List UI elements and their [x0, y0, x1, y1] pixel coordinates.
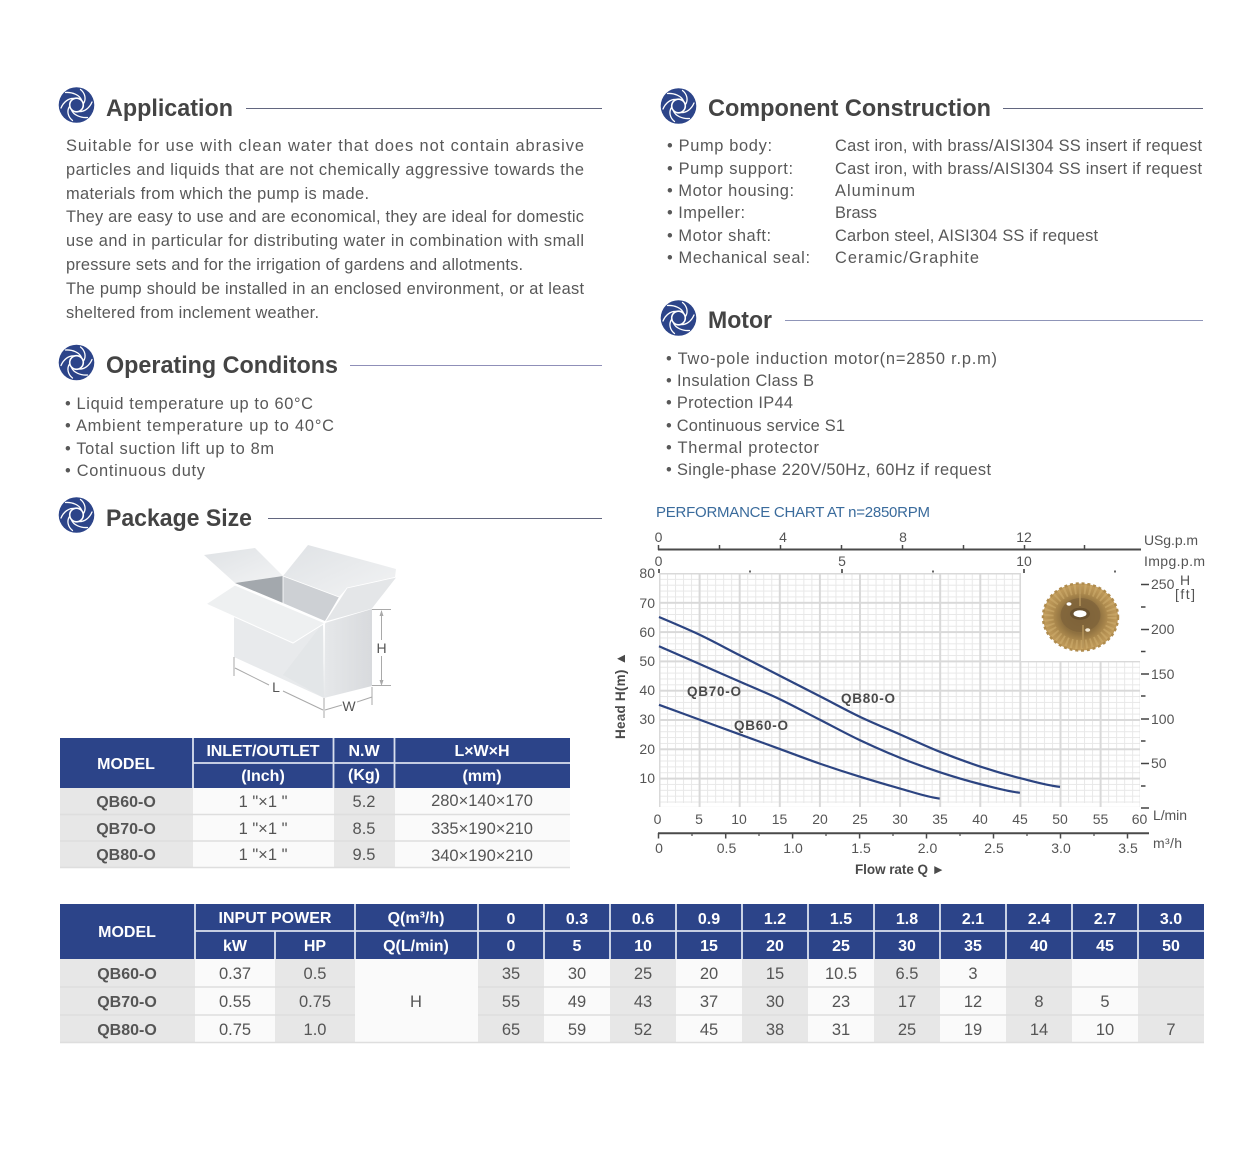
illustration: open carton with dimensions: H: [376, 640, 387, 656]
curve labels: QB80-O: [841, 691, 895, 706]
table: hydraulic performance: 15: [700, 938, 718, 955]
axis: head in metres: 40: [639, 682, 655, 698]
axis: flow in m3/h: 0.5: [717, 840, 736, 856]
list: component materials: Carbon steel, AISI304 SS if request: [835, 227, 1098, 245]
table: hydraulic performance: HP: [304, 938, 326, 955]
table: hydraulic performance: 0: [507, 911, 516, 928]
table: hydraulic performance: 10: [634, 938, 652, 955]
list: component materials: Brass: [835, 204, 877, 222]
table: hydraulic performance: 0.55: [219, 993, 251, 1011]
curve labels: QB70-O: [687, 684, 741, 699]
list: component materials: Ceramic/Graphite: [835, 249, 979, 267]
table: hydraulic performance: 30: [568, 965, 586, 983]
table: package size: 1 "×1 ": [239, 793, 288, 811]
heading: Operating Conditons: [59, 345, 602, 380]
axis: head in feet: 150: [1151, 666, 1175, 682]
list: motor features: • Insulation Class B: [666, 372, 814, 390]
table: hydraulic performance: 2.1: [962, 911, 984, 928]
table: hydraulic performance: 0.5: [304, 965, 326, 983]
axis: head in feet: H: [1180, 572, 1190, 588]
table: hydraulic performance: 40: [1030, 938, 1048, 955]
table: hydraulic performance: H: [410, 993, 422, 1011]
table: hydraulic performance: 10.5: [825, 965, 857, 983]
table: hydraulic performance: 20: [766, 938, 784, 955]
table: hydraulic performance: 2.4: [1028, 911, 1050, 928]
axis: head in metres: 20: [639, 741, 655, 757]
axis: Impg.p.m: 5: [838, 553, 846, 569]
table: package size: QB80-O: [96, 847, 156, 864]
axis: flow in L/min: 55: [1093, 811, 1108, 827]
axis: flow in L/min: 50: [1052, 811, 1068, 827]
list: component materials: Aluminum: [835, 182, 915, 200]
table: hydraulic performance: 0.9: [698, 911, 720, 928]
list: component materials: • Pump body:: [667, 137, 772, 155]
heading: Application: [59, 87, 602, 123]
text block: application description: materials from which the pump is made.: [66, 185, 369, 203]
axis: head in feet: 50: [1151, 755, 1167, 771]
table: package size: (mm): [462, 768, 502, 785]
table: hydraulic performance: INPUT POWER: [219, 910, 332, 927]
list: motor features: • Thermal protector: [666, 439, 820, 457]
table: hydraulic performance: 55: [502, 993, 520, 1011]
illustration: open carton with dimensions: [204, 545, 397, 718]
table: package size: MODEL: [97, 756, 155, 773]
list: operating conditions: • Total suction lift up to 8m: [65, 440, 274, 458]
list: component materials: • Mechanical seal:: [667, 249, 810, 267]
table: hydraulic performance: MODEL: [98, 924, 156, 941]
table: package size: N.W: [348, 743, 380, 760]
axis: head in feet: 200: [1151, 621, 1175, 637]
table: package size: 280×140×170: [431, 792, 533, 810]
curve: QB60-O: [659, 705, 940, 799]
table: hydraulic performance: 5: [573, 938, 582, 955]
heading: Component Construction: Component Construction: [708, 95, 991, 122]
table: hydraulic performance: 20: [700, 965, 718, 983]
axis: head in metres: Head H(m) ▲: [613, 652, 628, 739]
table: package size: (Kg): [348, 767, 380, 784]
table: package size: L×W×H: [454, 743, 510, 760]
list: operating conditions: [65, 395, 334, 480]
axis: flow in m3/h: 3.0: [1051, 840, 1071, 856]
axis: flow in L/min: [654, 807, 1187, 827]
list: operating conditions: • Ambient temperature up to 40°C: [65, 417, 334, 435]
list: component materials: • Motor shaft:: [667, 227, 771, 245]
curve: QB70-O: [659, 646, 1020, 793]
table: hydraulic performance: 0.6: [632, 911, 654, 928]
table: package size: QB60-O: [96, 794, 156, 811]
heading: Motor: Motor: [708, 307, 772, 334]
table: package size: 9.5: [353, 846, 375, 864]
table: hydraulic performance: 5: [1100, 993, 1110, 1011]
axis: head in metres: 70: [639, 595, 655, 611]
table: hydraulic performance: 25: [832, 938, 850, 955]
table: hydraulic performance: 52: [634, 1021, 652, 1039]
axis: flow in L/min: 0: [654, 811, 662, 827]
list: component materials: • Motor housing:: [667, 182, 794, 200]
axis: flow in L/min: 30: [892, 811, 908, 827]
table: hydraulic performance: 0.75: [219, 1021, 251, 1039]
table: hydraulic performance: QB60-O: [97, 966, 157, 983]
table: hydraulic performance: 1.2: [764, 911, 786, 928]
axis: USg.p.m: 12: [1016, 529, 1032, 545]
axis: head in feet: [1141, 572, 1195, 808]
axis: flow in L/min: 25: [852, 811, 868, 827]
table: package size: 335×190×210: [431, 820, 533, 838]
table: hydraulic performance: 25: [634, 965, 652, 983]
table: hydraulic performance: 1.8: [896, 911, 918, 928]
table: hydraulic performance: kW: [223, 938, 248, 955]
axis: Impg.p.m: Impg.p.m: [1144, 553, 1205, 569]
text block: application description: particles and liquids that are not chemically aggressive towards the: [66, 161, 584, 179]
list: motor features: • Two-pole induction motor(n=2850 r.p.m): [666, 350, 997, 368]
axis: flow in m3/h: 1.5: [851, 840, 871, 856]
heading: Application: Application: [106, 95, 233, 122]
text block: application description: pressure sets and for the irrigation of gardens and allotments.: [66, 256, 523, 274]
table: package size: 1 "×1 ": [239, 846, 288, 864]
axis: flow in m3/h: 2.5: [984, 840, 1004, 856]
table: hydraulic performance: 30: [898, 938, 916, 955]
list: motor features: [666, 350, 997, 479]
table: hydraulic performance: 45: [700, 1021, 718, 1039]
axis: flow in m3/h: [655, 833, 1182, 877]
axis: flow in m3/h: 0: [655, 840, 663, 856]
table: hydraulic performance: 0.37: [219, 965, 251, 983]
heading: Package Size: [59, 497, 602, 533]
table body columns: [60, 959, 1204, 1043]
text block: application description: Suitable for use with clean water that does not contain abrasive: [66, 137, 584, 155]
axis: flow in L/min: 20: [812, 811, 828, 827]
table: hydraulic performance: 35: [964, 938, 982, 955]
table: hydraulic performance: Q(L/min): [383, 938, 449, 955]
axis: head in metres: [613, 565, 655, 786]
table: hydraulic performance: Q(m³/h): [388, 910, 444, 927]
table: package size: 8.5: [353, 820, 375, 838]
table: hydraulic performance: 38: [766, 1021, 784, 1039]
table: hydraulic performance: 2.7: [1094, 911, 1116, 928]
table: package size: QB70-O: [96, 821, 156, 838]
list: component materials: • Impeller:: [667, 204, 745, 222]
axis: flow in L/min: 60: [1132, 811, 1147, 827]
axis: USg.p.m: USg.p.m: [1144, 532, 1198, 548]
table: hydraulic performance: 1.0: [304, 1021, 326, 1039]
curve: QB80-O: [659, 617, 1060, 787]
axis: flow in L/min: 45: [1012, 811, 1028, 827]
axis: head in metres: 60: [639, 624, 655, 640]
heading: Package Size: Package Size: [106, 505, 252, 532]
axis: head in metres: 80: [639, 565, 655, 581]
table: hydraulic performance: 0: [507, 938, 516, 955]
table: package size: 5.2: [353, 793, 375, 811]
table: package size: INLET/OUTLET: [206, 743, 320, 760]
table: hydraulic performance: 17: [898, 993, 916, 1011]
axis: flow in m3/h: 1.0: [783, 840, 803, 856]
text block: application description: The pump should be installed in an enclosed environment, or at least: [66, 280, 584, 298]
axis: flow in L/min: 15: [772, 811, 787, 827]
table: hydraulic performance: 0.3: [566, 911, 588, 928]
table: hydraulic performance: 31: [832, 1021, 850, 1039]
table: hydraulic performance: 7: [1166, 1021, 1176, 1039]
list: operating conditions: • Liquid temperature up to 60°C: [65, 395, 313, 413]
list: operating conditions: • Continuous duty: [65, 462, 206, 480]
table: hydraulic performance: 10: [1096, 1021, 1114, 1039]
axis: head in metres: 50: [639, 653, 655, 669]
table: package size: 1 "×1 ": [239, 820, 288, 838]
heading: Component Construction: [661, 88, 1203, 124]
table: hydraulic performance: 19: [964, 1021, 982, 1039]
illustration: open carton with dimensions: W: [342, 698, 356, 714]
text block: application description: use and in particular for distributing water in combination with small: [66, 232, 584, 250]
axis: head in metres: 10: [639, 770, 655, 786]
chart grid: [659, 566, 1146, 807]
table: hydraulic performance: 6.5: [896, 965, 918, 983]
table: hydraulic performance: QB80-O: [97, 1022, 157, 1039]
axis: flow in m3/h: m³/h: [1153, 835, 1182, 851]
curve labels: QB60-O: [734, 718, 788, 733]
axis: head in feet: [ft]: [1175, 586, 1195, 602]
table: hydraulic performance: QB70-O: [97, 994, 157, 1011]
axis: flow in L/min: 10: [731, 811, 747, 827]
table: hydraulic performance: 3.0: [1160, 911, 1182, 928]
list: component materials: • Pump support:: [667, 160, 793, 178]
list: component materials: Cast iron, with brass/AISI304 SS insert if request: [835, 137, 1202, 155]
table: package size: [60, 738, 570, 868]
performance chart: [613, 529, 1205, 877]
table: hydraulic performance: 43: [634, 993, 652, 1011]
axis: USg.p.m: [655, 529, 1198, 550]
axis: flow in L/min: 40: [972, 811, 988, 827]
table: hydraulic performance: 23: [832, 993, 850, 1011]
table: hydraulic performance: 45: [1096, 938, 1114, 955]
table: hydraulic performance: [60, 904, 1204, 1043]
table: hydraulic performance: 49: [568, 993, 586, 1011]
table: hydraulic performance: 25: [898, 1021, 916, 1039]
axis: Impg.p.m: 0: [655, 553, 663, 569]
table: hydraulic performance: 59: [568, 1021, 586, 1039]
axis: USg.p.m: 4: [779, 529, 787, 545]
heading: Operating Conditons: Operating Conditons: [106, 352, 338, 379]
icon: impeller photo: [1043, 584, 1118, 650]
table: package size: 340×190×210: [431, 847, 533, 865]
axis: Impg.p.m: 10: [1016, 553, 1032, 569]
axis: flow in L/min: 5: [695, 811, 703, 827]
axis: USg.p.m: 0: [655, 529, 663, 545]
axis: head in feet: 250: [1151, 576, 1175, 592]
table: hydraulic performance: 15: [766, 965, 784, 983]
list: component materials: Cast iron, with brass/AISI304 SS insert if request: [835, 160, 1202, 178]
text block: application description: [66, 137, 584, 322]
axis: head in metres: 30: [639, 711, 655, 727]
axis: flow in L/min: 35: [932, 811, 948, 827]
axis: flow in m3/h: 2.0: [918, 840, 937, 856]
axis: head in feet: 100: [1151, 711, 1175, 727]
list: motor features: • Continuous service S1: [666, 417, 845, 435]
table: hydraulic performance: 65: [502, 1021, 520, 1039]
table: hydraulic performance: 8: [1034, 993, 1044, 1011]
axis: flow in m3/h: 3.5: [1118, 840, 1138, 856]
curve labels: [687, 684, 895, 733]
table: hydraulic performance: 14: [1030, 1021, 1048, 1039]
table: hydraulic performance: 0.75: [299, 993, 331, 1011]
table: hydraulic performance: 30: [766, 993, 784, 1011]
list: component materials: [667, 137, 1202, 267]
axis: Impg.p.m: [655, 553, 1205, 573]
table: hydraulic performance: 1.5: [830, 911, 852, 928]
table: hydraulic performance: 3: [968, 965, 978, 983]
text block: application description: They are easy to use and are economical, they are ideal for domestic: [66, 208, 584, 226]
table: hydraulic performance: 35: [502, 965, 520, 983]
text block: application description: sheltered from inclement weather.: [66, 304, 319, 322]
table: hydraulic performance: 12: [964, 993, 982, 1011]
chart title: PERFORMANCE CHART AT n=2850RPM: [656, 504, 930, 521]
axis: flow in L/min: L/min: [1153, 807, 1187, 823]
axis: USg.p.m: 8: [899, 529, 907, 545]
list: motor features: • Single-phase 220V/50Hz, 60Hz if request: [666, 461, 991, 479]
heading: Motor: [661, 300, 1203, 336]
illustration: open carton with dimensions: L: [272, 679, 280, 695]
table: hydraulic performance: 37: [700, 993, 718, 1011]
table: hydraulic performance: 50: [1162, 938, 1180, 955]
table: package size: (Inch): [241, 768, 285, 785]
list: motor features: • Protection IP44: [666, 394, 793, 412]
axis: flow in m3/h: Flow rate Q ►: [855, 862, 945, 877]
